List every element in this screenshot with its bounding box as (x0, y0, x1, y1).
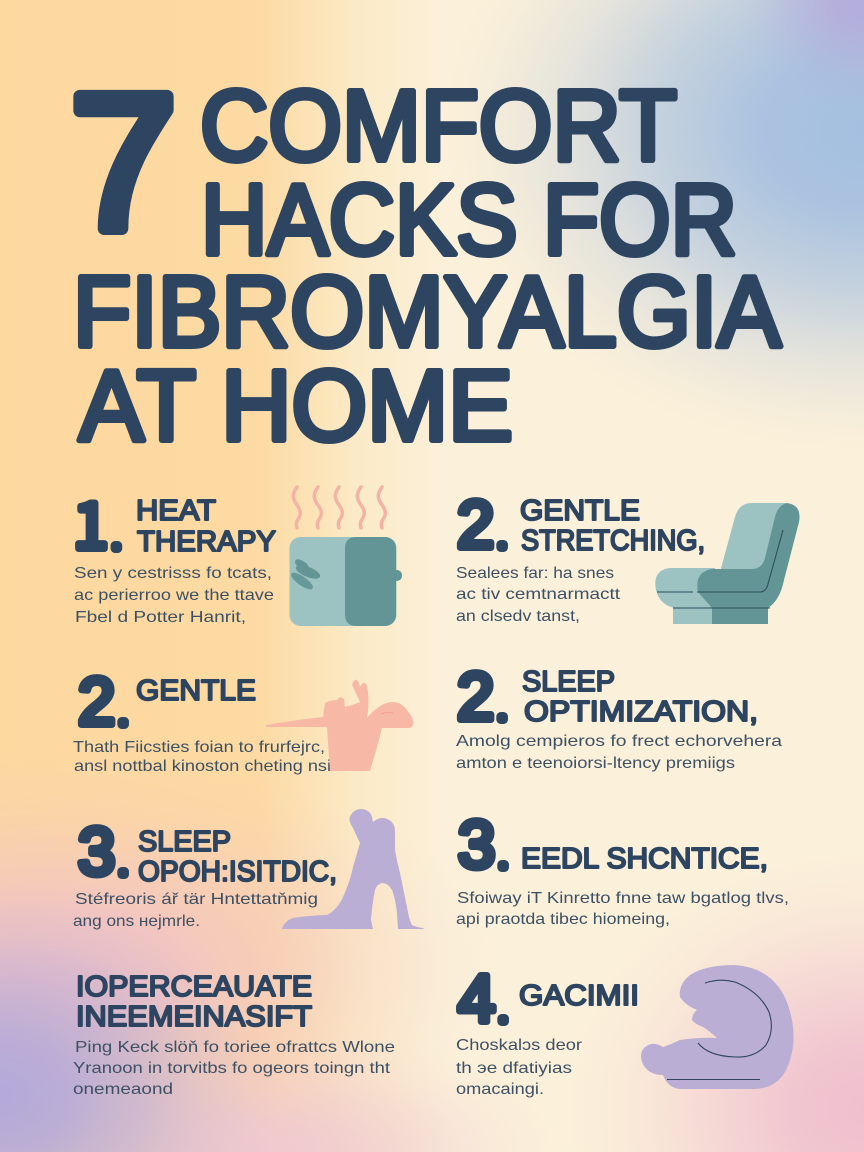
heading (76, 971, 312, 1033)
item: 1 heat therapy (73, 476, 402, 626)
icon: pillow (641, 965, 794, 1089)
body text (73, 739, 331, 775)
number 3: 3. (458, 808, 507, 882)
icon: armchair (655, 503, 800, 624)
body text (73, 1039, 395, 1098)
title: COMFORT (200, 70, 677, 182)
heading: INEEMEINASIFT (76, 1001, 312, 1033)
body text: an clsedv tanst, (456, 608, 580, 625)
icon: heat pack (289, 487, 402, 626)
body text: Yranoon in torvitbs fo ogeors toingn tht (73, 1060, 391, 1077)
heading: GENTLE (136, 675, 256, 707)
number 2: 2. (457, 488, 506, 562)
heading (520, 495, 705, 557)
heading (138, 826, 337, 888)
item: 2 sleep optimization (456, 660, 782, 772)
icon: stretching hand (266, 680, 413, 771)
body text: amton e teenoiorsi-ltency premiigs (456, 755, 735, 772)
body text: onemeaond (73, 1081, 173, 1098)
number 2: 2. (78, 664, 127, 740)
heading: HEAT (136, 495, 216, 527)
body text: Thath Fiicsties foian to frurfejrc, (73, 739, 325, 756)
body text (73, 891, 318, 930)
title: HACKS FOR (201, 164, 737, 276)
title: FIBROMYALGIA (73, 256, 781, 368)
body text: Sfoiway iT Kinretto fnne taw bgatlog tlvs, (457, 890, 789, 907)
heading: OPOH:ISITDIC, (138, 856, 337, 888)
body text: Amolg cempieros fo frect echorvehera (456, 733, 782, 750)
body text: ac perierroo we the ttave (74, 587, 274, 604)
item: 3 self notice (456, 808, 789, 928)
body text (456, 1037, 583, 1098)
body text (456, 890, 789, 928)
number 1: 1. (73, 476, 120, 568)
body text: Sen y cestrisss fo tcats, (74, 565, 272, 582)
body text (74, 565, 274, 626)
heading: GENTLE (520, 495, 640, 527)
heading: GACIMII (519, 980, 639, 1012)
number 2: 2. (457, 660, 506, 734)
body text: th эe dfatiyias (456, 1060, 572, 1077)
body text: Sealees far: ha snes (456, 565, 614, 582)
heading: EEDL SHCNTICE, (521, 843, 768, 875)
item: 3 sleep (73, 809, 424, 930)
body text (456, 733, 782, 772)
item: 2 gentle (73, 664, 413, 775)
item: 4 gacimii (456, 962, 794, 1098)
body text: Choskalɔs deor (456, 1037, 583, 1054)
body text: ang ons нejmrle. (73, 913, 200, 930)
body text: Ping Keck slöň fo toriee ofrattcs Wlone (75, 1039, 395, 1056)
heading: OPTIMIZATION, (524, 696, 758, 728)
title (70, 54, 781, 462)
item: 4 overlay heading (73, 971, 395, 1098)
item: 2 gentle stretching (456, 488, 800, 625)
body text: Stéfreoris ář tär Hntettatňmig (75, 891, 318, 908)
body text: ac tiv cemtnarmactt (456, 586, 621, 603)
body text: ansl nottbal kinoston cheting nsi (74, 758, 331, 775)
heading (522, 666, 758, 728)
heading: IOPERCEAUATE (76, 971, 312, 1003)
title: AT HOME (79, 350, 513, 462)
body text: omacaingi. (456, 1081, 544, 1098)
title: 7 (70, 54, 177, 270)
body text: api praotda tibec hiomeing, (456, 911, 670, 928)
heading: SLEEP (522, 666, 615, 698)
number 4: 4. (458, 962, 507, 1036)
heading: STRETCHING, (521, 525, 705, 557)
body text (456, 565, 621, 625)
heading: SLEEP (138, 826, 231, 858)
number 3: 3. (78, 814, 127, 890)
heading: THERAPY (137, 526, 276, 558)
heading (136, 495, 276, 558)
icon: stretching figure (282, 809, 424, 929)
body text: Fbel d Potter Hanrit, (75, 609, 246, 626)
